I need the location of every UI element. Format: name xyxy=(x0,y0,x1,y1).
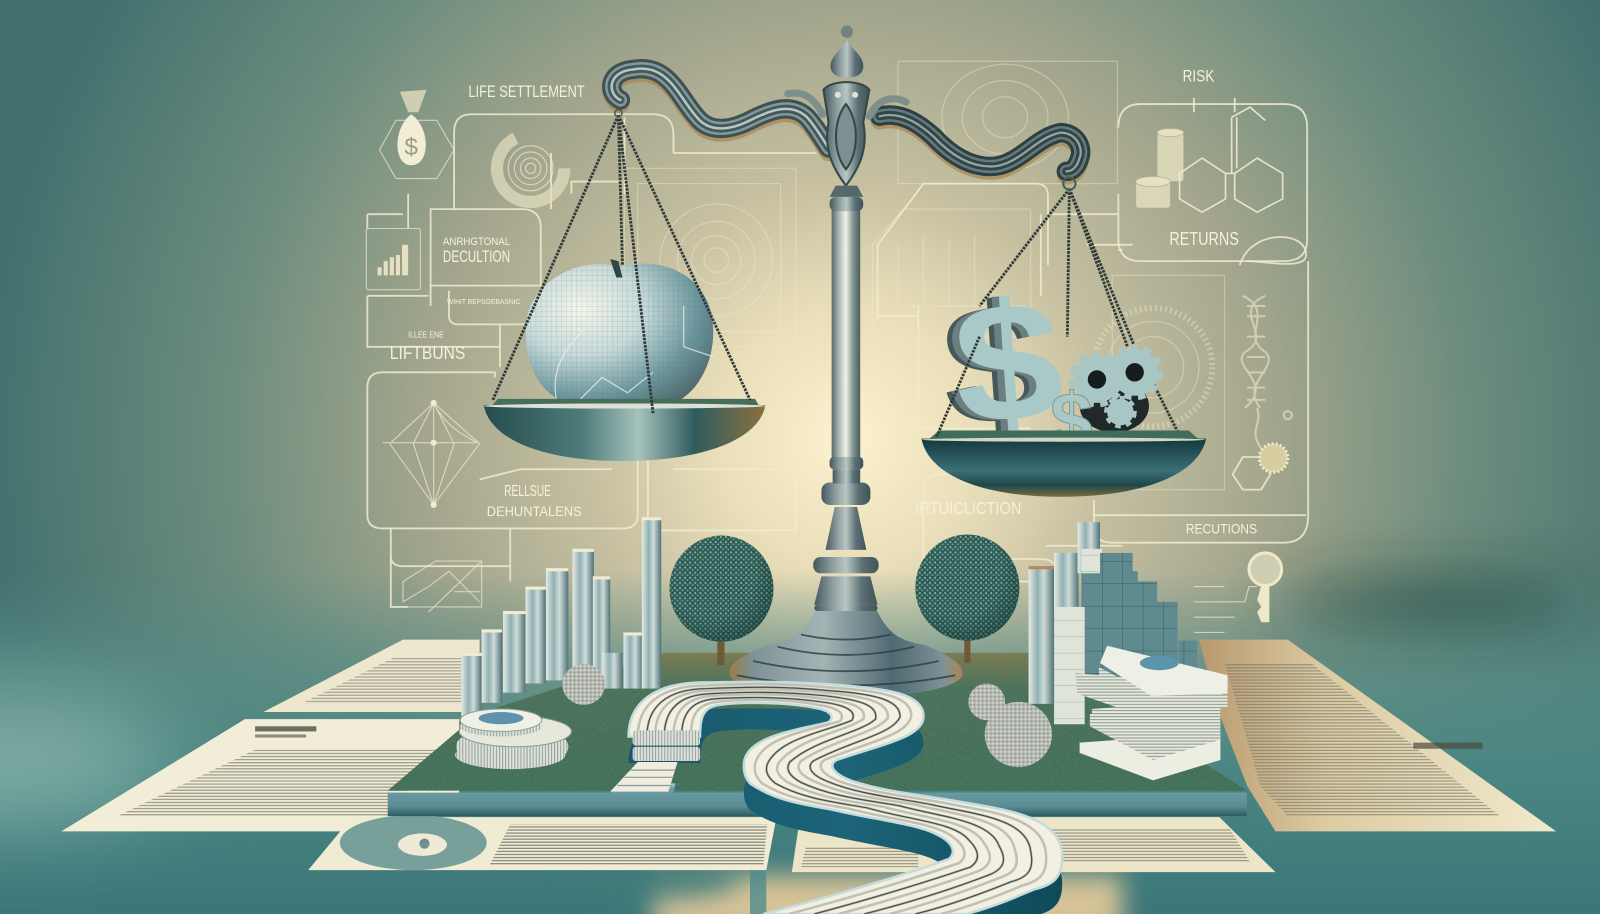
icon: stone ball left xyxy=(562,664,605,705)
text block: Liftbuns: LIFTBUNS xyxy=(390,342,465,363)
text block: Rellsue Dehuntalens xyxy=(487,483,582,520)
document: bottom right xyxy=(792,817,1276,872)
icon: tree left xyxy=(669,536,773,665)
icon: diamond network xyxy=(383,400,480,508)
chart: right block tower xyxy=(1029,522,1197,724)
icon: right pan with dollar signs and gears: $ xyxy=(948,266,1068,460)
document: bottom left xyxy=(308,815,777,870)
icon: right pan with dollar signs and gears: $ xyxy=(1050,378,1093,464)
icon: hexagon and sun xyxy=(1233,444,1288,490)
icon: money bag in hexagon xyxy=(380,90,454,179)
scene: lawn platform xyxy=(388,653,1247,816)
chart: left bars xyxy=(461,517,661,716)
text: Irtuiclicition: IRTUICLICTION xyxy=(915,498,1021,518)
text: Recutions: RECUTIONS xyxy=(1186,522,1257,538)
floor reflection xyxy=(566,859,1122,914)
icon: right pan with dollar signs and gears xyxy=(921,177,1206,497)
icon: DNA helix xyxy=(1242,296,1292,454)
icon: road steps xyxy=(610,730,700,792)
panel: left blueprint frames xyxy=(367,114,816,607)
icon: coin stacks xyxy=(1136,129,1184,208)
text block: Anrhgtonal Deculation: ANRHGTONAL xyxy=(443,236,510,248)
icon: key with magnifier xyxy=(1249,553,1282,622)
icon: right pan with dollar signs and gears: $ xyxy=(936,268,1056,462)
icon: book stack xyxy=(1076,646,1228,780)
text block: Liftbuns xyxy=(390,331,465,363)
document: top left xyxy=(263,640,480,712)
text block: Anrhgtonal Deculation xyxy=(443,236,521,306)
text block: Anrhgtonal Deculation: WIHIT BEPSGEBASNIC xyxy=(447,297,521,306)
icon: right pan with dollar signs and gears: $ xyxy=(941,267,1061,461)
icon: scale beam xyxy=(612,69,1081,175)
heading: Risk: RISK xyxy=(1183,68,1214,86)
icon: small bar chart xyxy=(366,228,420,290)
icon: folded hand sketch xyxy=(403,561,482,612)
text block: Rellsue Dehuntalens: RELLSUE xyxy=(504,483,551,500)
icon: coin stack xyxy=(455,709,571,769)
icon: beam ornament and finial xyxy=(823,26,869,197)
icon: scale base and column xyxy=(729,197,962,698)
text block: Anrhgtonal Deculation: DECULTION xyxy=(443,248,510,266)
heading: Returns: RETURNS xyxy=(1169,228,1239,249)
icon: tree right xyxy=(915,535,1019,663)
document: middle left xyxy=(61,719,459,831)
icon: winding road xyxy=(629,682,1062,914)
icon: left pan with apple xyxy=(484,110,765,461)
text block: Rellsue Dehuntalens: DEHUNTALENS xyxy=(487,504,582,520)
panel: right blueprint frames xyxy=(878,98,1308,632)
icon: chemical structure xyxy=(1180,107,1283,212)
heading: Life Settlement: LIFE SETTLEMENT xyxy=(468,83,585,101)
panel: faint background schematics xyxy=(624,61,1224,490)
icon: stone balls right xyxy=(968,683,1052,767)
document: right large xyxy=(1199,640,1556,831)
icon: target rings xyxy=(497,135,564,202)
text block: Liftbuns: ILLEE ENE xyxy=(408,331,444,340)
icon: money bag in hexagon: $ xyxy=(404,134,418,161)
